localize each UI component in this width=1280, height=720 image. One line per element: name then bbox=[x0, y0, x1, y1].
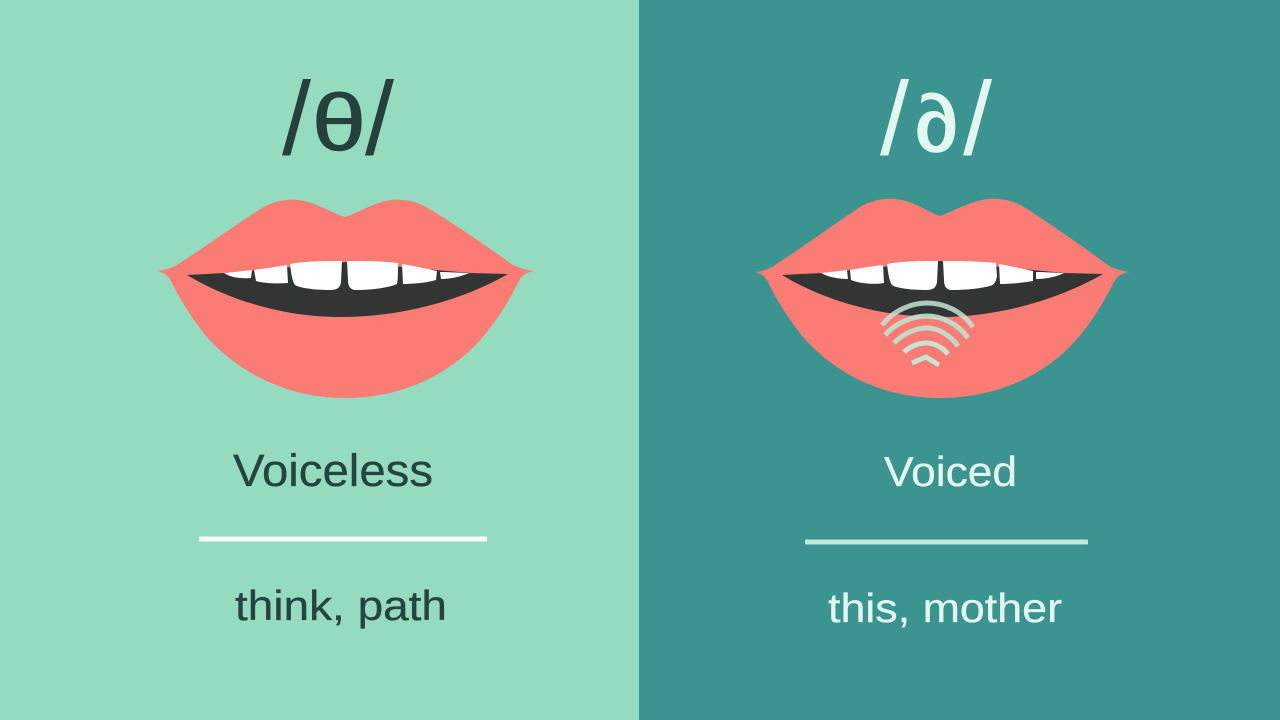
panel: voiceless bbox=[0, 0, 639, 720]
panel: voiced bbox=[639, 0, 1280, 720]
icon: voiceless lips bbox=[157, 200, 535, 398]
heading: voiceless phoneme symbol: θ bbox=[312, 78, 366, 167]
label: voiced: Voiced bbox=[884, 448, 1017, 495]
heading: voiceless phoneme symbol: / bbox=[365, 62, 394, 178]
mouth opening bbox=[782, 261, 1103, 317]
outer lips bbox=[157, 200, 535, 398]
heading: voiced phoneme symbol: ∂ bbox=[905, 80, 966, 169]
heading: voiced phoneme symbol bbox=[880, 62, 992, 178]
mouth opening bbox=[187, 262, 508, 317]
teeth bbox=[224, 261, 469, 290]
examples: this, mother: this, mother bbox=[828, 585, 1062, 631]
label: voiceless: Voiceless bbox=[233, 445, 433, 496]
heading: voiceless phoneme symbol bbox=[282, 62, 394, 178]
icon: voicing vibration waves bbox=[882, 303, 973, 365]
icon: voiced lips bbox=[755, 199, 1130, 398]
heading: voiceless phoneme symbol: / bbox=[282, 62, 311, 178]
heading: voiced phoneme symbol: / bbox=[963, 62, 992, 178]
outer lips bbox=[755, 199, 1130, 398]
heading: voiced phoneme symbol: / bbox=[880, 62, 909, 178]
examples: think, path: think, path bbox=[235, 582, 447, 629]
teeth bbox=[821, 261, 1064, 290]
